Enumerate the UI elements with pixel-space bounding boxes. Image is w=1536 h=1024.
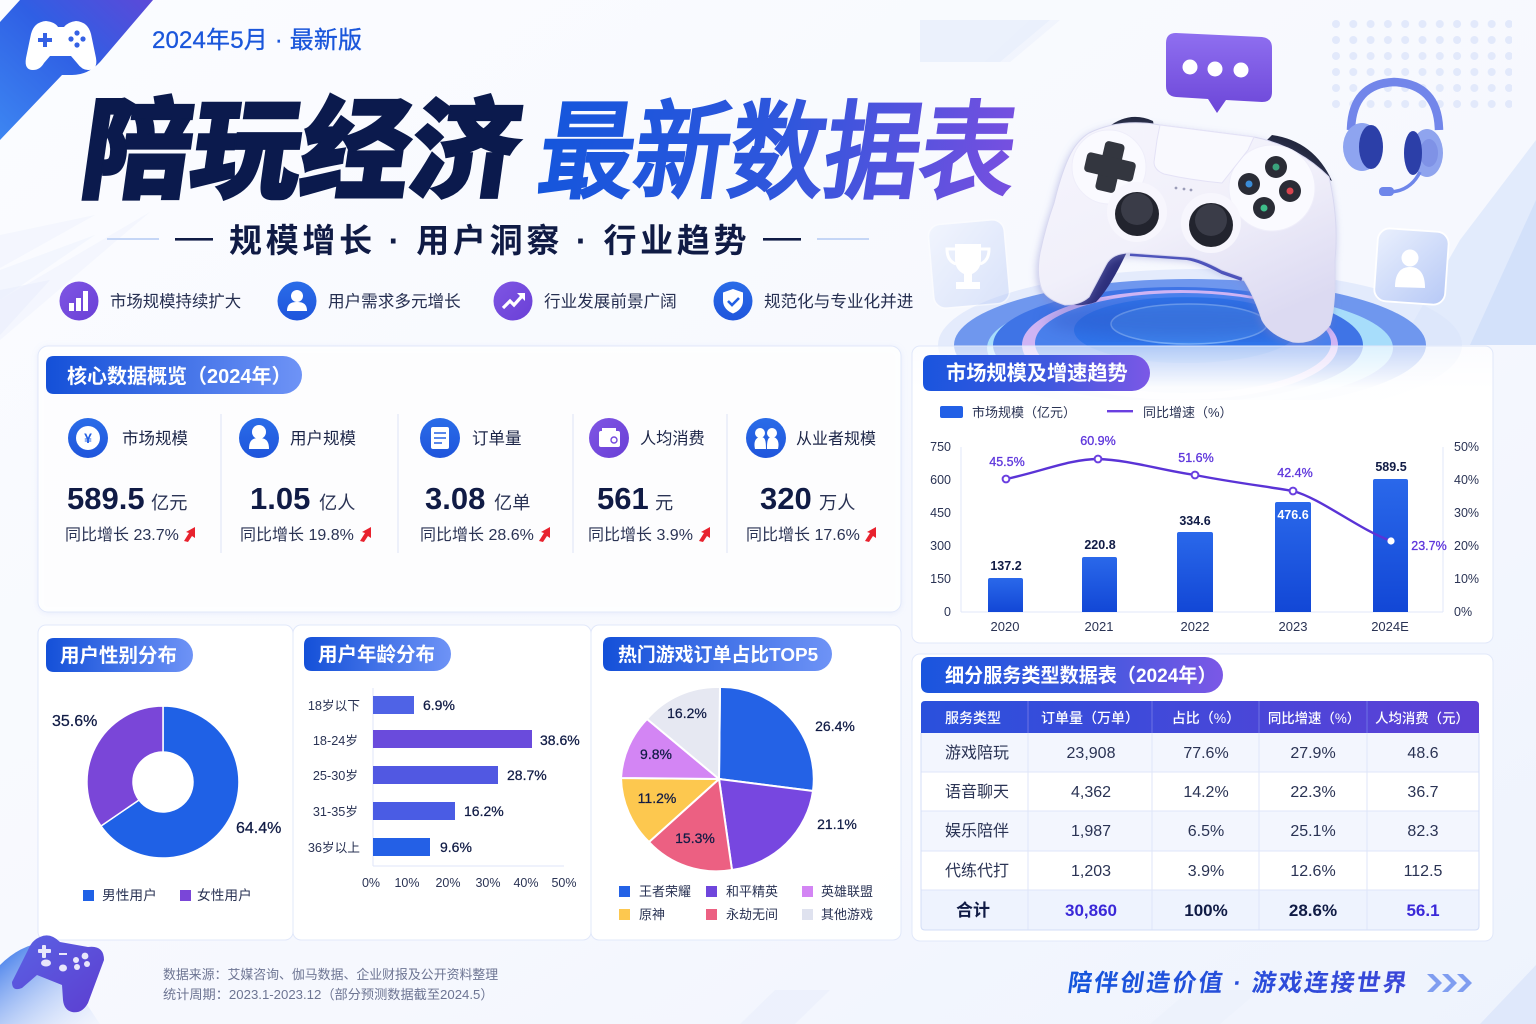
dpad [1080, 137, 1140, 197]
age labels: 18-24岁 [313, 734, 358, 748]
metric: practitioners: 从业者规模 [796, 430, 876, 448]
trend left axis labels [930, 440, 951, 619]
metric: users: 用户规模 [290, 429, 356, 448]
heading: table: 细分服务类型数据表（2024年） [945, 664, 1217, 687]
age axis labels [362, 876, 577, 890]
trend right axis labels: 50% [1454, 440, 1479, 454]
pie labels: 16.2% [667, 705, 707, 721]
bar values: 476.6 [1277, 508, 1309, 522]
bar values: 589.5 [1375, 460, 1407, 474]
donut labels [52, 713, 281, 837]
pie chart [621, 687, 814, 871]
heading: games [603, 637, 832, 671]
metric: spend: 元 [655, 493, 673, 513]
source note [163, 967, 498, 1002]
year labels: 2022 [1181, 619, 1209, 634]
pie legend: 和平精英 [726, 884, 778, 899]
pie labels: 21.1% [817, 816, 857, 832]
trend right axis labels: 30% [1454, 506, 1479, 520]
metric: spend [588, 418, 710, 544]
year labels [991, 619, 1409, 634]
age values: 28.7% [507, 767, 547, 783]
table header: 人均消费（元） [1375, 711, 1469, 726]
growth line [1003, 456, 1395, 545]
slogan: 陪伴创造价值 · 游戏连接世界 [1066, 970, 1411, 997]
trend legend: 同比增速（%） [1143, 405, 1233, 420]
donut chart [87, 706, 239, 858]
year labels: 2020 [991, 619, 1019, 634]
growth labels: 23.7% [1411, 539, 1447, 553]
status dots [1175, 187, 1192, 191]
metric: users: 同比增长 19.8% [240, 526, 354, 544]
trend right axis labels: 0% [1454, 605, 1472, 619]
age labels: 18岁以下 [308, 699, 360, 713]
bar values [990, 460, 1407, 573]
pie legend: 其他游戏 [821, 907, 873, 922]
feature: market: 市场规模持续扩大 [110, 293, 241, 311]
metric: market size: 亿元 [151, 493, 187, 513]
controller shoulders and crescents [1074, 117, 1332, 305]
pie legend: 英雄联盟 [821, 884, 873, 899]
heading: core data: 核心数据概览（2024年） [67, 364, 292, 388]
metric: users: 1.05 [250, 481, 310, 516]
age labels: 25-30岁 [313, 769, 358, 783]
feature: market [60, 282, 241, 320]
data table [921, 701, 1479, 930]
growth labels: 42.4% [1277, 466, 1313, 480]
age labels [308, 699, 360, 855]
row: game companion: 游戏陪玩 [945, 744, 1009, 762]
row: entertainment: 6.5% [1188, 823, 1224, 840]
row: voice chat [945, 783, 1439, 801]
pie labels: 26.4% [815, 718, 855, 734]
row: boosting [945, 862, 1443, 880]
trend bars [988, 479, 1408, 612]
row: total: 56.1 [1406, 901, 1440, 920]
date tag: 2024年5月 · 最新版 [152, 27, 362, 54]
metric: users [239, 418, 371, 544]
slogan arrows [1427, 974, 1472, 992]
row: entertainment: 82.3 [1407, 823, 1439, 840]
age axis labels: 20% [435, 876, 461, 890]
row: game companion: 48.6 [1407, 745, 1439, 762]
metric: market size: ¥ [84, 430, 92, 446]
trend right axis labels: 40% [1454, 473, 1479, 487]
age axis labels: 30% [475, 876, 501, 890]
hero platform [938, 269, 1462, 385]
trend right axis labels: 10% [1454, 572, 1479, 586]
age axis labels: 40% [513, 876, 539, 890]
pie labels: 9.8% [640, 746, 672, 762]
logo: gamepad [26, 21, 96, 70]
row: game companion [945, 744, 1439, 762]
pie legend: 王者荣耀 [639, 884, 691, 899]
age values: 6.9% [423, 697, 455, 713]
row: voice chat: 14.2% [1183, 784, 1229, 801]
age axis labels: 0% [362, 876, 380, 890]
row: total: 30,860 [1065, 901, 1117, 920]
metric: orders: 亿单 [494, 493, 530, 513]
donut labels: 64.4% [236, 820, 281, 837]
trend left axis labels: 300 [930, 539, 951, 553]
age axis labels: 50% [551, 876, 577, 890]
feature: shield [714, 282, 913, 320]
row: boosting: 12.6% [1290, 863, 1336, 880]
table row shading [921, 733, 1479, 930]
growth labels: 51.6% [1178, 451, 1214, 465]
person tile [1374, 228, 1449, 305]
metric: spend: 同比增长 3.9% [588, 526, 693, 544]
heading: gender [46, 638, 193, 672]
age values: 38.6% [540, 732, 580, 748]
corner banner [0, 0, 153, 140]
table header: 同比增速（%） [1268, 710, 1360, 726]
age values: 16.2% [464, 803, 504, 819]
row: boosting: 3.9% [1188, 863, 1224, 880]
row: entertainment: 1,987 [1071, 823, 1111, 840]
metric: practitioners: 同比增长 17.6% [746, 526, 860, 544]
table header [921, 701, 1479, 733]
heading: age [304, 637, 451, 671]
metric: market size: 589.5 [67, 481, 145, 516]
trend left axis labels: 600 [930, 473, 951, 487]
row: entertainment [945, 822, 1439, 840]
footer swoosh [0, 942, 100, 1024]
row: total: 28.6% [1289, 901, 1337, 920]
table grid [921, 733, 1479, 930]
growth labels [989, 434, 1447, 553]
speech bubble [1166, 33, 1272, 113]
touchpad [1154, 125, 1254, 183]
sticks [1107, 182, 1241, 253]
trend left axis labels: 0 [944, 605, 951, 619]
controller shadow [1045, 302, 1325, 338]
metric: market size [65, 418, 195, 544]
pie legend [619, 884, 873, 922]
bar values: 220.8 [1084, 538, 1116, 552]
controller body [1038, 123, 1336, 342]
row: total: 100% [1184, 901, 1228, 920]
trend legend [940, 405, 1233, 420]
age axes [373, 688, 564, 866]
heading: trend [923, 355, 1150, 391]
panel: age [293, 625, 591, 940]
pie labels [638, 705, 857, 846]
age values: 9.6% [440, 839, 472, 855]
trend left axis labels: 150 [930, 572, 951, 586]
bar values: 334.6 [1179, 514, 1211, 528]
row: voice chat: 4,362 [1071, 784, 1111, 801]
panel: gender [38, 625, 293, 940]
metric: practitioners: 320 [760, 481, 812, 516]
panel: service table [912, 654, 1493, 941]
gender legend: 女性用户 [197, 887, 252, 903]
table header: 占比（%） [1172, 710, 1240, 726]
heading: table [921, 657, 1223, 693]
feature: users [278, 282, 461, 320]
age bars [373, 696, 532, 856]
age labels: 36岁以上 [308, 841, 360, 855]
metric: orders [420, 418, 550, 544]
metric: practitioners: 万人 [819, 493, 855, 513]
trend right axis labels [1454, 440, 1479, 619]
row: game companion: 77.6% [1183, 745, 1229, 762]
age labels: 31-35岁 [313, 805, 358, 819]
trend left axis labels: 750 [930, 440, 951, 454]
metric: orders: 同比增长 28.6% [420, 526, 534, 544]
feature: trend: 行业发展前景广阔 [544, 292, 677, 311]
year labels: 2023 [1279, 619, 1307, 634]
table header: 服务类型 [945, 710, 1001, 726]
panel: market trend [912, 346, 1493, 643]
row: boosting: 代练代打 [945, 862, 1009, 880]
row: voice chat: 36.7 [1407, 784, 1439, 801]
source note: 数据来源：艾媒咨询、伽马数据、企业财报及公开资料整理 [163, 967, 498, 982]
metric: spend: 人均消费 [640, 430, 705, 448]
pie labels: 15.3% [675, 830, 715, 846]
heading: core data [46, 356, 302, 394]
growth labels: 45.5% [989, 455, 1025, 469]
heading: age: 用户年龄分布 [318, 643, 435, 666]
row: entertainment: 娱乐陪伴 [945, 822, 1009, 840]
headset [1343, 82, 1443, 196]
trend right axis labels: 20% [1454, 539, 1479, 553]
metric: orders: 订单量 [472, 429, 522, 448]
panel: core data [38, 346, 901, 612]
source note: 统计周期：2023.1-2023.12（部分预测数据截至2024.5） [163, 987, 494, 1002]
table header: 订单量（万单） [1041, 710, 1139, 726]
trophy tile [927, 219, 1011, 309]
title gradient part: 最新数据表 [532, 94, 1024, 212]
heading: games: 热门游戏订单占比TOP5 [618, 643, 818, 666]
heading: gender: 用户性别分布 [60, 644, 177, 667]
dividers [221, 414, 727, 553]
trend left axis labels: 450 [930, 506, 951, 520]
age values [423, 697, 580, 855]
growth labels: 60.9% [1080, 434, 1116, 448]
row: total [956, 900, 1440, 920]
gender legend [83, 887, 252, 903]
year labels: 2021 [1085, 619, 1113, 634]
row: voice chat: 22.3% [1290, 784, 1336, 801]
feature: trend [494, 282, 677, 320]
heading: trend: 市场规模及增速趋势 [946, 361, 1128, 385]
gender legend: 男性用户 [102, 887, 157, 903]
row: entertainment: 25.1% [1290, 823, 1336, 840]
row: game companion: 23,908 [1067, 745, 1116, 762]
row: voice chat: 语音聊天 [945, 783, 1009, 801]
footer gamepad [12, 935, 104, 1012]
feature: users: 用户需求多元增长 [328, 292, 461, 311]
pie legend: 永劫无间 [726, 907, 778, 922]
pie legend: 原神 [639, 907, 665, 922]
trend axes [961, 447, 1443, 612]
button dishes [1072, 130, 1315, 231]
year labels: 2024E [1371, 619, 1409, 634]
donut labels: 35.6% [52, 713, 97, 730]
trend legend: 市场规模（亿元） [972, 405, 1076, 420]
age axis labels: 10% [394, 876, 420, 890]
row: boosting: 1,203 [1071, 863, 1111, 880]
pie labels: 11.2% [638, 790, 676, 806]
metric: users: 亿人 [319, 493, 355, 513]
panel: top games [591, 625, 901, 940]
subtitle: 规模增长 · 用户洞察 · 行业趋势 [229, 222, 750, 259]
face buttons [1238, 156, 1301, 219]
row: total: 合计 [956, 900, 990, 920]
metric: orders: 3.08 [425, 481, 485, 516]
bar values: 137.2 [990, 559, 1022, 573]
row: game companion: 27.9% [1290, 745, 1336, 762]
metric: practitioners [746, 418, 876, 544]
feature: shield: 规范化与专业化并进 [764, 292, 913, 311]
row: boosting: 112.5 [1404, 863, 1443, 880]
metric: market size: 同比增长 23.7% [65, 526, 179, 544]
metric: market size: 市场规模 [122, 429, 188, 448]
dot grid [1332, 16, 1512, 112]
hero controller [1038, 117, 1336, 342]
metric: spend: 561 [597, 481, 649, 516]
title dark part: 陪玩经济 [75, 90, 529, 213]
